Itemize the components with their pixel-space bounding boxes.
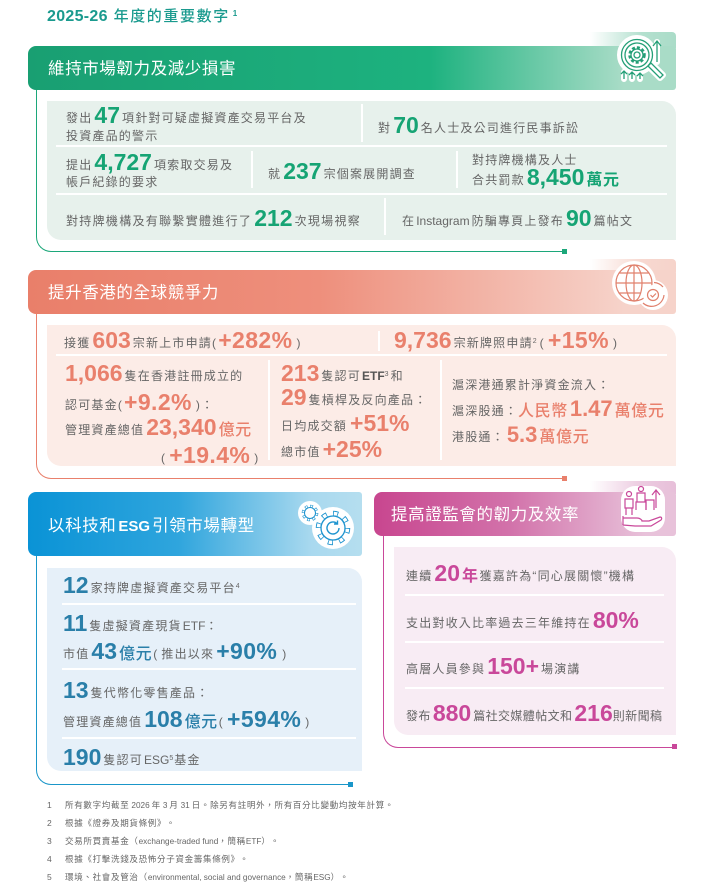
footnote 5	[47, 868, 349, 887]
footnote 5: 5	[47, 872, 52, 882]
heading: resilience: 維持市場韌力及減少損害	[48, 60, 236, 78]
stat: 80% expense ratio: 支出對收入比率過去三年維持在80%	[406, 607, 639, 633]
stat: 47 warnings: 發出47項針對可疑虛擬資產交易平台及	[66, 102, 307, 128]
heading: competitiveness: 提升香港的全球競爭力	[48, 284, 219, 302]
panel: SFC stats	[394, 547, 676, 735]
tab: resilience header	[590, 32, 676, 48]
header: technology and ESG	[28, 492, 362, 556]
panel: resilience stats	[47, 101, 676, 240]
panel: technology stats	[47, 568, 362, 771]
bracket: competitiveness section	[36, 314, 564, 479]
stat: 29 leveraged products: 29隻槓桿及反向產品：	[281, 384, 427, 410]
footnote 5: 環境、社會及管治（environmental, social and governance，簡稱ESG）。	[65, 872, 349, 882]
heading: technology and ESG: 以科技和ESG引領市場轉型	[48, 517, 255, 535]
footnote 4: 根據《打擊洗錢及恐怖分子資金籌集條例》。	[65, 854, 249, 864]
stat: 8,450 fines: 合共罰款8,450萬元	[472, 164, 620, 190]
stat: 70 civil proceedings: 對70名人士及公司進行民事訴訟	[378, 112, 579, 138]
heading: SFC resilience: 提高證監會的韌力及效率	[391, 506, 579, 524]
icon: gears	[298, 501, 354, 549]
stat: 11 virtual asset ETFs: 11隻虛擬資產現貨ETF：	[63, 610, 219, 636]
header: resilience	[28, 46, 676, 90]
footnotes	[47, 800, 394, 882]
footnote 3: 3	[47, 836, 52, 846]
end marker: resilience section	[562, 248, 567, 254]
stat: 190 ESG funds: 190隻認可ESG5基金	[63, 744, 201, 770]
stat: 150+ speeches: 高層人員參與150+場演講	[406, 653, 581, 679]
stat: 23,340 AUM: 管理資產總值23,340億元	[65, 414, 252, 440]
footnote 2: 根據《證券及期貨條例》。	[65, 818, 175, 828]
stat: market cap 25%: 總市值+25%	[281, 436, 382, 462]
stat: 603 listing applications: 接獲603宗新上市申請(+282% )	[64, 327, 302, 353]
footnote 2: 2	[47, 818, 52, 828]
stat: 213 ETFs: 213隻認可ETF3和	[281, 360, 404, 386]
stat: turnover 51%: 日均成交額+51%	[281, 410, 409, 436]
footnote 4: 4	[47, 854, 52, 864]
stat: 1,066 funds: 1,066隻在香港註冊成立的	[65, 360, 243, 386]
stat: 20 years Caring Organisation: 連續20年獲嘉許為“同心展關懷”機構	[406, 560, 635, 586]
footnote 1: 1	[47, 800, 52, 810]
stat: northbound 1.47 trillion: 滬深股通：人民幣1.47萬億元	[452, 396, 664, 421]
stat: 880 posts and 216 press releases: 發布880篇社交媒體帖文和216則新聞稿	[406, 700, 662, 726]
tab: competitiveness header	[590, 259, 676, 272]
stat: fund growth 9.2%: 認可基金(+9.2% )：	[65, 389, 214, 415]
stat: 13 tokenised products: 13隻代幣化零售產品：	[63, 677, 209, 703]
text: stock connect heading: 滬深港通累計淨資金流入：	[452, 378, 610, 392]
header: SFC resilience	[374, 492, 676, 536]
footnote 1: 所有數字均截至2026年3月31日。除另有註明外，所有百分比變動均按年計算。	[65, 800, 394, 810]
stat text: requests continued: 帳戶紀錄的要求	[66, 175, 158, 189]
title: 2025-26 年度的重要數字 1	[47, 8, 239, 25]
icon: globe with target	[612, 261, 668, 310]
stat: 9,736 licence applications: 9,736宗新牌照申請2(+15% )	[394, 327, 618, 353]
bracket: resilience section	[36, 90, 564, 252]
stat: AUM growth 19.4%: (+19.4% )	[161, 442, 259, 468]
stat: 108 AUM: 管理資產總值108億元(+594% )	[63, 706, 310, 732]
stat: 237 investigations: 就237宗個案展開調查	[268, 158, 416, 184]
bracket: SFC section	[383, 536, 674, 748]
panel: competitiveness stats	[47, 325, 676, 466]
stat: southbound 5.3 trillion: 港股通：5.3萬億元	[452, 422, 589, 447]
footnote 3: 交易所買賣基金（exchange-traded fund，簡稱ETF）。	[65, 836, 280, 846]
end marker: technology section	[348, 782, 353, 786]
icon: magnifier with gear	[617, 35, 666, 82]
tab: SFC header	[590, 481, 676, 494]
stat: 43 market cap: 市值43億元(推出以來+90% )	[63, 638, 288, 664]
stat: 212 on-site inspections: 對持牌機構及有聯繫實體進行了212次現場視察	[66, 205, 361, 231]
stat: 90 Instagram posts: 在Instagram防騙專頁上發布90篇帖文	[402, 205, 633, 231]
stat: 4,727 requests: 提出4,727項索取交易及	[66, 149, 233, 175]
stat text: warnings continued: 投資產品的警示	[66, 129, 158, 143]
stat text: fines lead-in: 對持牌機構及人士	[472, 153, 578, 167]
end marker: SFC section	[672, 744, 677, 749]
header: competitiveness	[28, 270, 676, 314]
icon: hand with people and arrow	[621, 486, 665, 532]
stat: 12 VATPs: 12家持牌虛擬資產交易平台4	[63, 572, 240, 598]
end marker: competitiveness section	[562, 476, 567, 480]
bracket: technology section	[36, 556, 350, 785]
